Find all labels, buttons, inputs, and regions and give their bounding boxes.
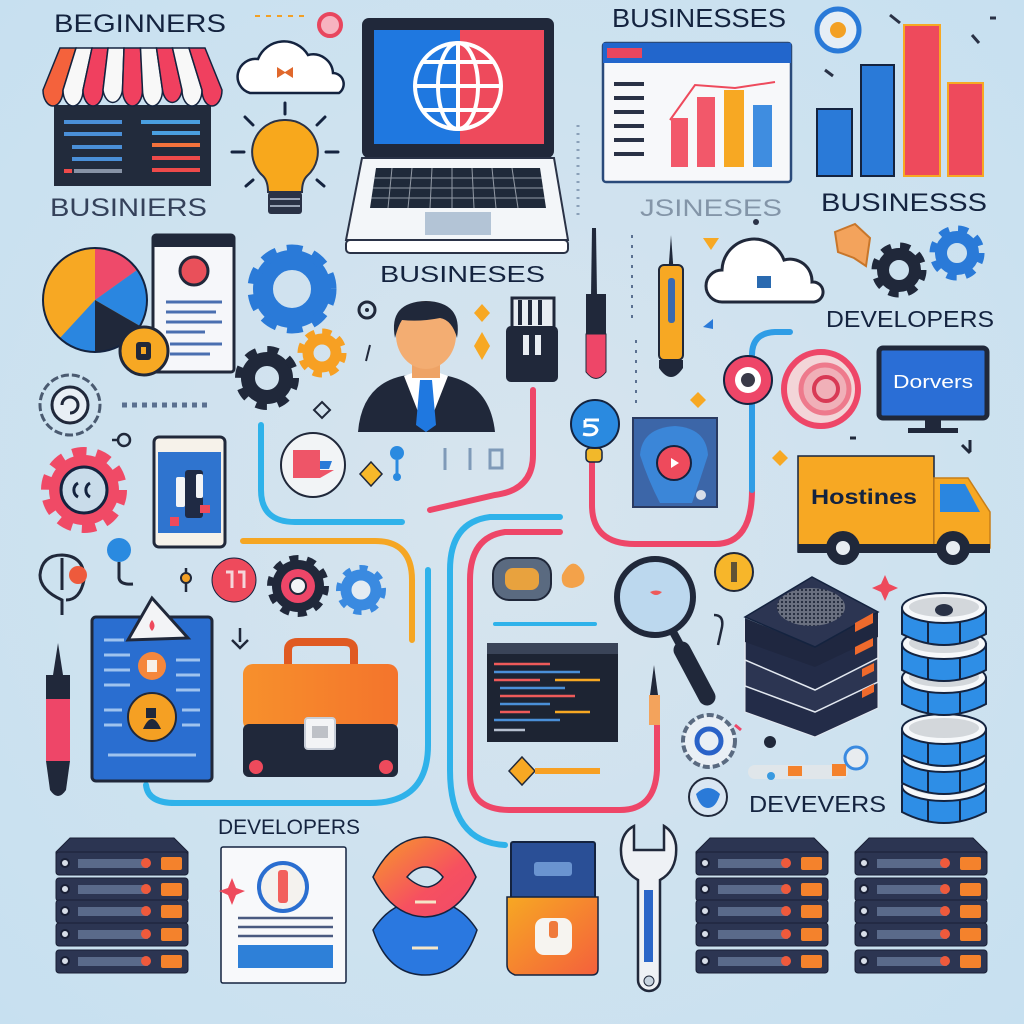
dotted squiggle bbox=[122, 402, 212, 408]
icon: target lower bbox=[683, 715, 741, 767]
icon: outline head bbox=[40, 555, 87, 615]
icon: disk panel bbox=[633, 418, 717, 507]
icon: small key bbox=[509, 757, 600, 785]
icon: grey node pair bbox=[493, 558, 584, 600]
icon: small red ring bbox=[255, 14, 341, 36]
icon: small orange diamond bbox=[690, 392, 788, 466]
icon: target left bbox=[40, 375, 100, 435]
icon: orange splash gear bbox=[835, 224, 870, 266]
icon: smartphone bbox=[154, 437, 225, 547]
icon: dark gear right bbox=[875, 246, 923, 294]
icon: server rack right bbox=[855, 838, 987, 973]
icon: small dart bbox=[181, 568, 191, 592]
icon: small marks row bbox=[112, 434, 130, 446]
icon: blue pin bbox=[107, 538, 133, 584]
icon: delivery truck bbox=[798, 456, 990, 565]
icon: phone document bbox=[153, 235, 234, 372]
icon: storefront bbox=[43, 48, 222, 186]
icon: briefcase bbox=[243, 642, 398, 777]
icon: delivery truck: Hostines bbox=[811, 486, 917, 509]
label: businesses centre: BUSINESES bbox=[380, 261, 545, 287]
icon: blue gear bbox=[253, 250, 331, 328]
icon: magnifying glass bbox=[617, 559, 707, 697]
icon: server rack left bbox=[56, 838, 188, 973]
heading: beginners: BEGINNERS bbox=[54, 10, 226, 38]
label: developers lower: DEVELOPERS bbox=[218, 816, 360, 839]
icon: small mid row bbox=[360, 446, 502, 486]
icon: round badge centre left bbox=[281, 433, 345, 497]
icon: blue round badge bbox=[689, 778, 727, 816]
icon: red ring node bbox=[724, 356, 772, 404]
icon: yellow folder with blue tablet bbox=[507, 842, 598, 975]
icon: colourful ring bbox=[373, 837, 477, 975]
icon: small clip bbox=[714, 615, 722, 645]
icon: server rack middle bbox=[696, 838, 828, 973]
panel: code window bbox=[487, 643, 618, 742]
icon: usb stick bbox=[506, 298, 558, 382]
icon: target top right bbox=[817, 9, 996, 76]
icon: cloud right bbox=[706, 239, 823, 302]
icon: orange diamonds bbox=[474, 304, 490, 360]
icon: light bulb bbox=[232, 103, 338, 214]
icon: blue gear right bbox=[933, 229, 981, 277]
connector lines bbox=[146, 332, 790, 845]
label: developers right: DEVELOPERS bbox=[826, 306, 994, 332]
pie chart bbox=[43, 248, 147, 352]
dotted divider bbox=[576, 125, 580, 215]
label: businiers: BUSINIERS bbox=[50, 194, 207, 222]
icon: red spiral target bbox=[784, 352, 858, 426]
icon: laptop with globe bbox=[346, 18, 568, 253]
icon: orange gear bbox=[301, 332, 343, 374]
icon: yellow badge bbox=[120, 327, 168, 375]
bar chart: large bbox=[817, 25, 983, 176]
icon: database stack bbox=[902, 593, 986, 823]
icon: dark gear bbox=[239, 350, 295, 406]
icon: pen on code bbox=[649, 665, 660, 725]
icon: pen orange bbox=[659, 235, 683, 377]
icon: small marks right bbox=[850, 438, 970, 453]
dotted column bbox=[632, 235, 636, 405]
icon: small flags bbox=[703, 219, 759, 329]
icon: document bbox=[219, 847, 346, 983]
icon: server stack bbox=[745, 577, 878, 737]
icon: blue gear small bbox=[339, 568, 383, 612]
icon: cloud small bbox=[238, 41, 344, 93]
panel: browser chart bbox=[603, 43, 791, 182]
icon: small arrow bbox=[232, 628, 248, 648]
icon: pen left bbox=[46, 643, 70, 796]
icon: red gear left bbox=[46, 452, 122, 528]
icon: blue lock node bbox=[571, 400, 619, 462]
icon: faded orange trail bbox=[748, 736, 867, 780]
icon: clipboard bbox=[92, 598, 212, 781]
icon: wrench bbox=[621, 826, 676, 991]
icon: red round badge bbox=[212, 558, 256, 602]
icon: small marks bbox=[314, 302, 375, 418]
icon: monitor bbox=[879, 348, 987, 433]
icon: monitor: Dorvers bbox=[893, 372, 973, 392]
label: businesss: BUSINESSS bbox=[821, 189, 987, 217]
icon: dark red gear bbox=[270, 558, 326, 614]
label: devevers: DEVEVERS bbox=[749, 791, 886, 817]
icon: red star bbox=[872, 575, 898, 601]
icon: businessman bbox=[358, 301, 495, 432]
heading: businesses top: BUSINESSES bbox=[612, 3, 786, 33]
label: faded businesses: JSINESES bbox=[640, 195, 782, 222]
icon: screwdriver red bbox=[586, 228, 606, 378]
icon: yellow coin bbox=[715, 553, 753, 591]
